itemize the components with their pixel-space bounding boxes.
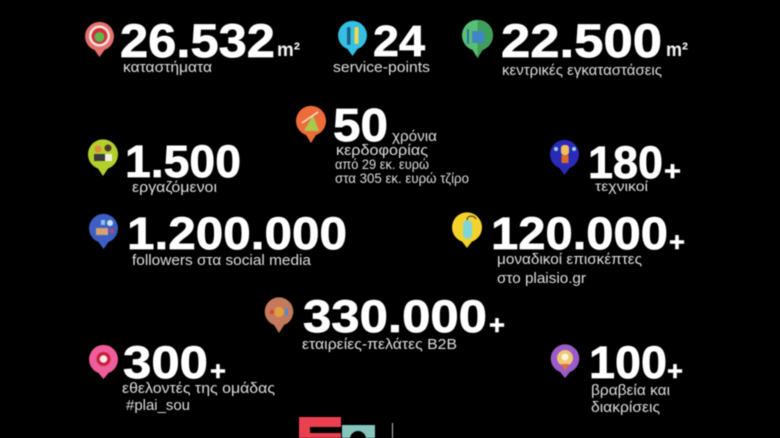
label: εταιρείες-πελάτες B2B [302,336,457,353]
number: 100 [589,337,667,388]
icon: brown handshake pin [265,297,293,333]
icon: navy technician pin [550,140,579,175]
icon: blue tools pin [338,21,367,56]
icon: pink heart pin [89,345,118,379]
number: 1.200.000 [127,208,347,259]
icon: orange growth pin [296,106,326,143]
label: βραβεία και [591,382,670,399]
label: χρόνια [392,128,437,145]
stat: employees 1.500 [88,136,241,196]
number: 26.532 [120,14,275,67]
label: μοναδικοί επισκέπτες [497,251,642,268]
label: εθελοντές της ομάδας [122,380,275,397]
number: 330.000 [303,291,487,342]
number: 300 [123,337,208,388]
stat: technicians 180+ [550,137,681,194]
label [335,128,469,186]
icon: purple medal pin [551,344,579,378]
icon: blue social pin [89,214,118,249]
label [122,380,275,414]
number: 24 [373,17,426,66]
plus: + [664,156,681,186]
stat: social followers 1.200.000 [89,208,347,269]
number: 50 [333,99,388,151]
stat: central facilities 22.500 m² [462,14,688,79]
icon: red store pin [85,22,114,57]
label: τεχνικοί [595,178,648,194]
label [497,251,642,287]
number: 120.000 [491,208,668,259]
stat: awards 100+ [551,337,683,416]
plus: + [667,356,683,386]
label: κερδοφορίας [336,142,428,159]
number: 22.500 [501,14,662,67]
plus: + [669,227,685,257]
label: διακρίσεις [591,399,660,416]
label: service-points [333,59,430,76]
logo: cropped 50 mark [299,417,393,438]
number: 180 [588,137,663,188]
label: από 29 εκ. ευρώ [335,156,429,172]
stat: stores 26.532 m² [85,14,300,76]
icon: yellow mouse pin [452,212,482,248]
stat: service points 24 [333,17,430,76]
icon: green warehouse pin [462,20,493,58]
plus: + [489,310,505,340]
stat: website visitors 120.000+ [452,208,685,287]
stat: B2B customers 330.000+ [265,291,505,353]
label: κεντρικές εγκαταστάσεις [502,62,662,79]
label: στα 305 εκ. ευρώ τζίρο [335,170,469,186]
number: 1.500 [125,136,241,187]
label: followers στα social media [132,252,312,269]
icon: lime people pin [88,139,118,176]
label: στο plaisio.gr [497,270,586,287]
label: εργαζόμενοι [132,179,217,196]
unit: m² [666,40,688,61]
unit: m² [277,40,300,61]
stat: volunteers 300+ [89,337,275,414]
stat: 50 years of profitability [296,99,469,186]
plus: + [210,356,226,386]
label [591,382,670,416]
label: καταστήματα [123,59,212,76]
label: #plai_sou [126,397,190,414]
